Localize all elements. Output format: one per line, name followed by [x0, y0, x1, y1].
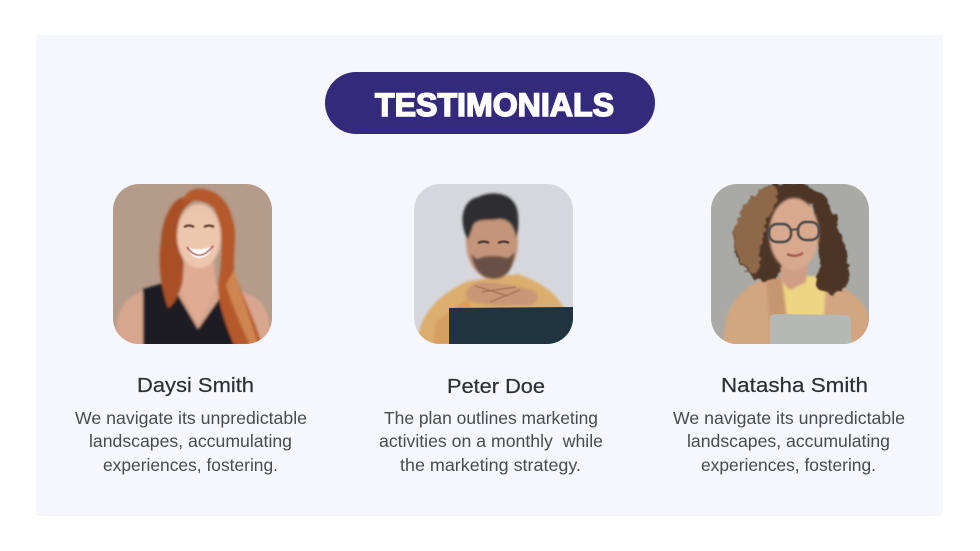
name: Natasha Smith	[721, 374, 868, 397]
name: Peter Doe	[447, 375, 545, 398]
testimonial: Natasha Smith	[673, 182, 905, 475]
quote: the marketing strategy.	[400, 455, 581, 475]
quote	[379, 408, 603, 475]
title: TESTIMONIALS	[375, 87, 614, 123]
quote: activities on a monthly while	[379, 431, 603, 451]
quote: The plan outlines marketing	[384, 408, 598, 428]
quote: experiences, fostering.	[103, 455, 278, 475]
quote: landscapes, accumulating	[687, 431, 890, 451]
portrait: Natasha Smith	[711, 182, 869, 345]
quote: experiences, fostering.	[701, 455, 876, 475]
testimonial: Daysi Smith	[75, 184, 307, 475]
name: Daysi Smith	[137, 374, 254, 397]
quote	[673, 408, 905, 475]
quote: We navigate its unpredictable	[75, 408, 307, 428]
testimonial: Peter Doe	[379, 184, 603, 475]
portrait: Daysi Smith	[113, 184, 272, 346]
quote	[75, 408, 307, 475]
title pill	[325, 72, 655, 134]
quote: We navigate its unpredictable	[673, 408, 905, 428]
quote: landscapes, accumulating	[89, 431, 292, 451]
portrait: Peter Doe	[414, 184, 573, 345]
